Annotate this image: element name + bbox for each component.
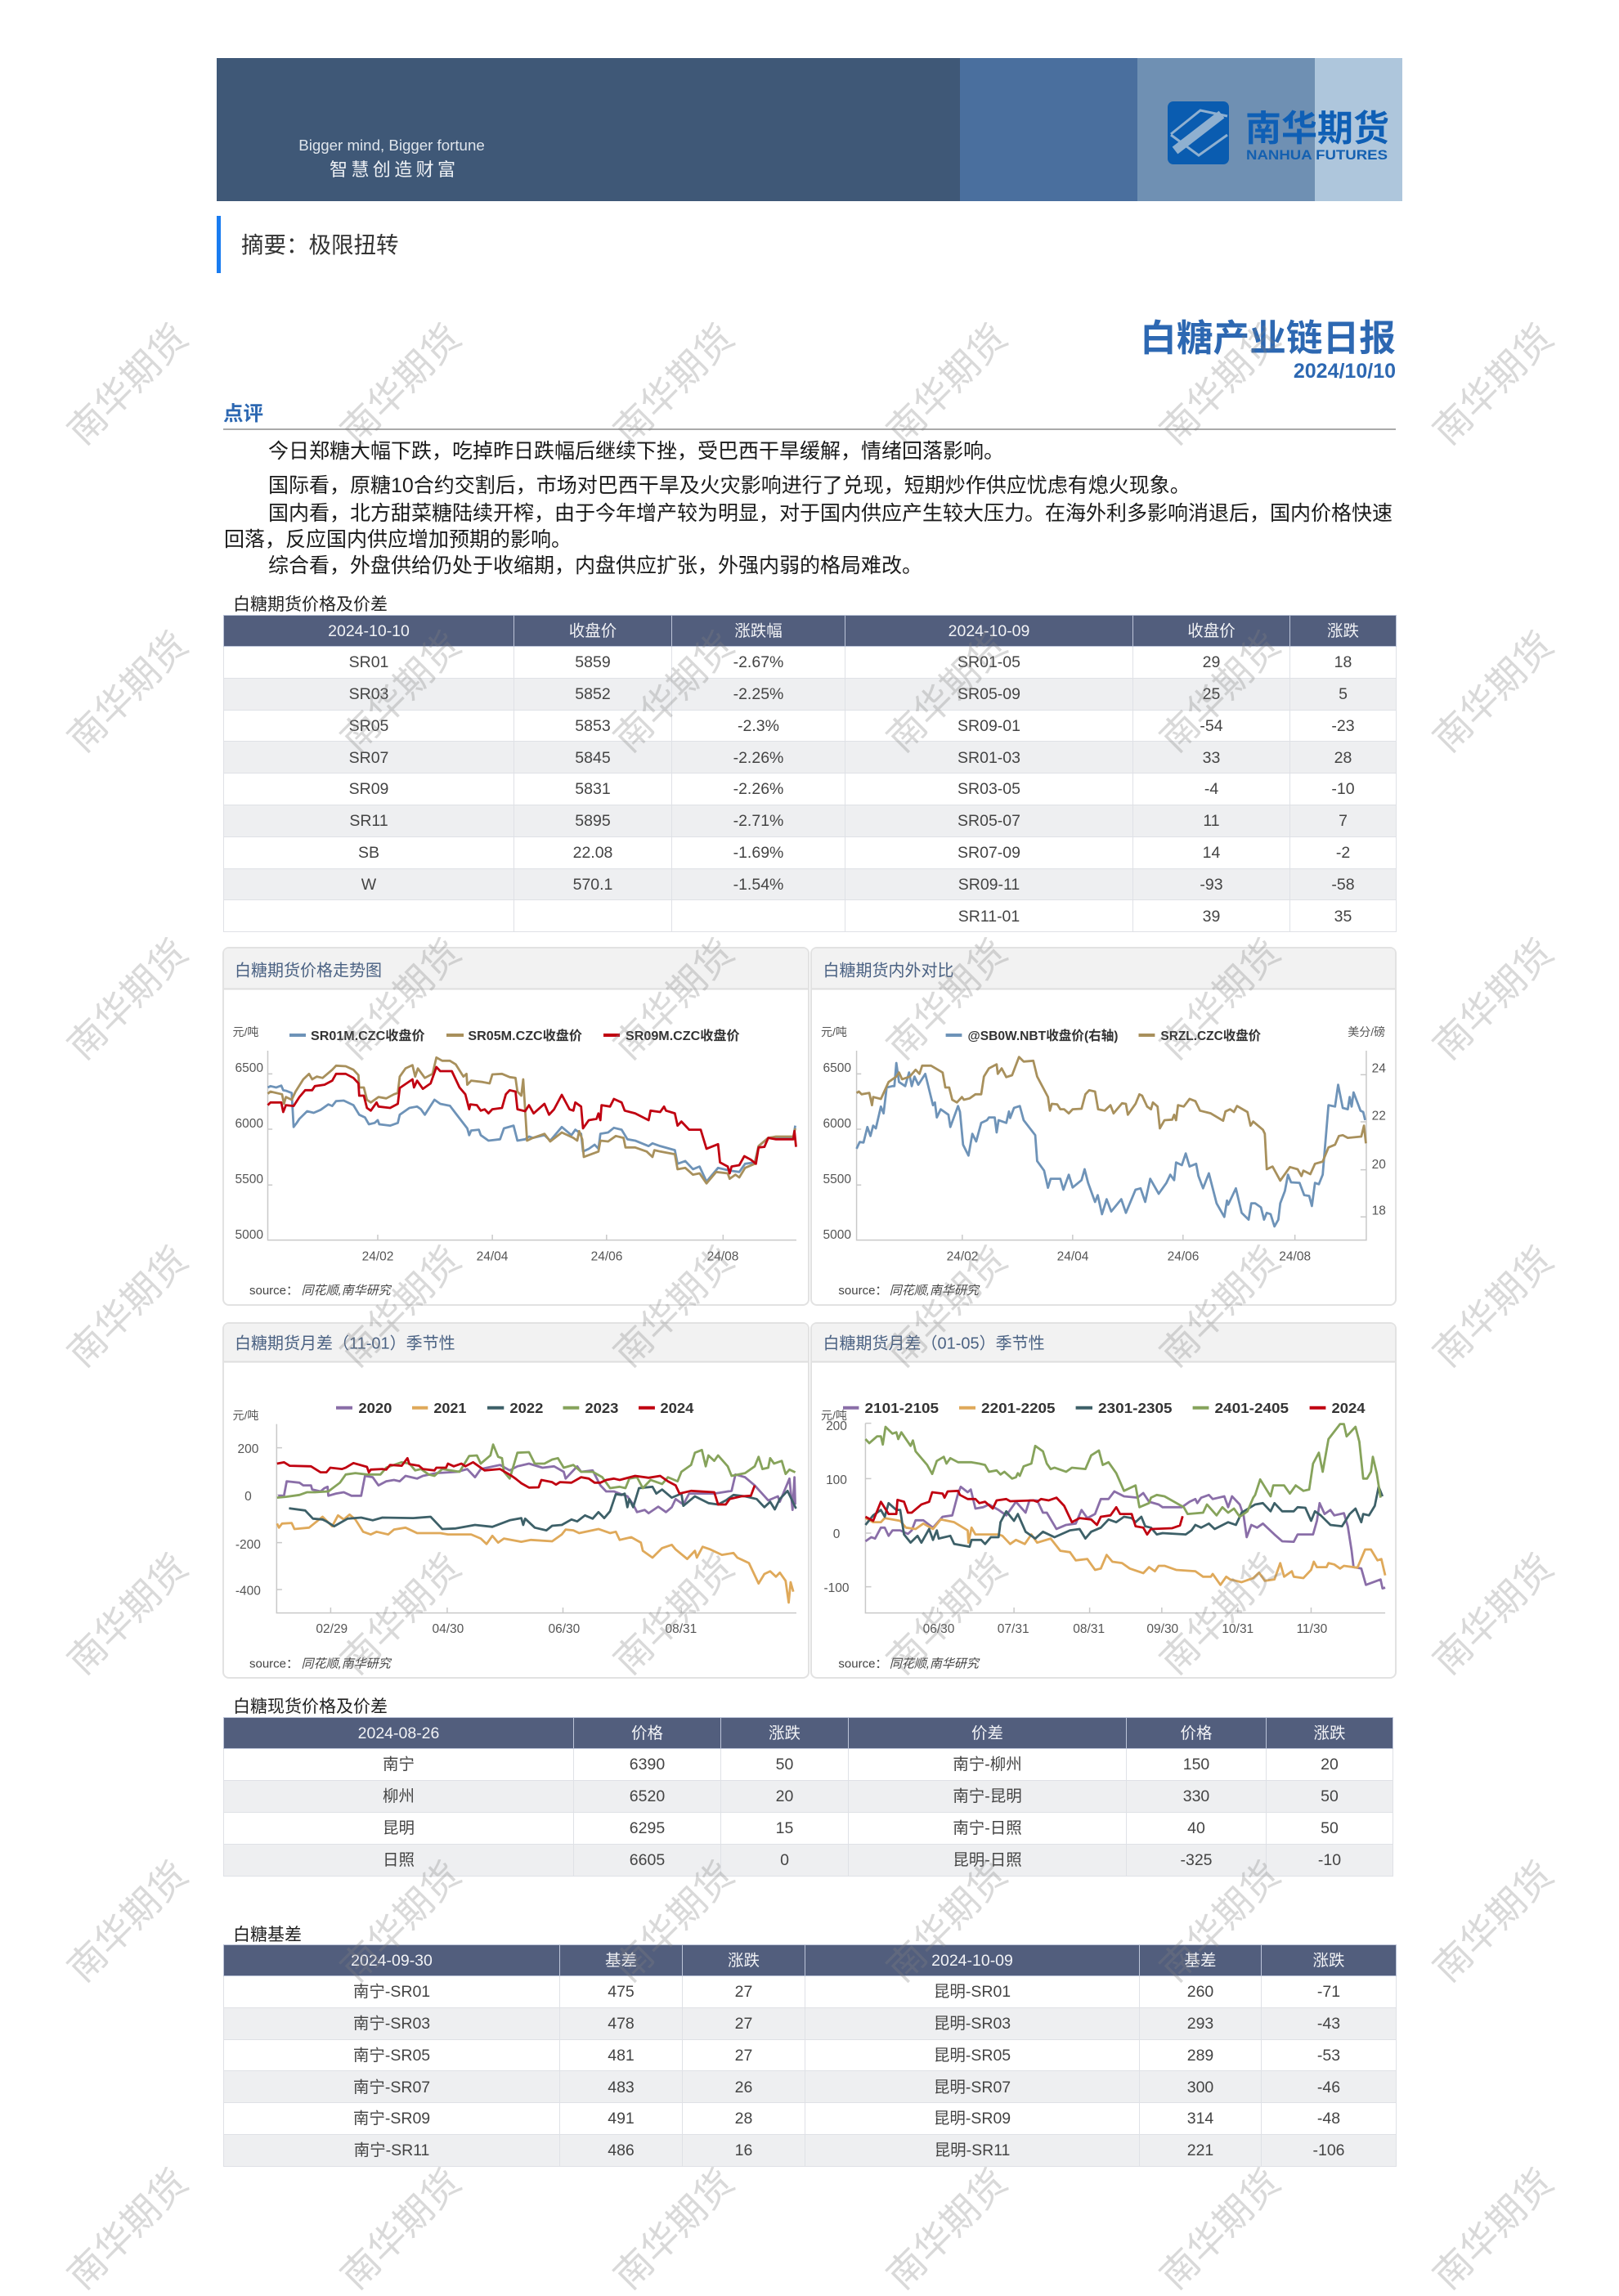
table: basis: 昆明-SR03 — [934, 2015, 1011, 2033]
y axis labels: 200 — [826, 1419, 847, 1433]
watermark overlay: 南华期货 — [879, 1239, 1015, 1374]
legend — [946, 1028, 1261, 1043]
watermark overlay: 南华期货 — [333, 316, 469, 452]
line chart — [865, 1424, 1385, 1613]
watermark overlay: 南华期货 — [879, 931, 1015, 1067]
slogan english: Bigger mind, Bigger fortune — [298, 137, 485, 154]
watermark overlay: 南华期货 — [60, 1239, 195, 1374]
x axis labels: 24/08 — [1279, 1249, 1311, 1264]
watermark overlay: 南华期货 — [333, 1239, 469, 1374]
table: basis: 27 — [735, 1983, 752, 2001]
legend: 2022 — [509, 1400, 544, 1416]
summary heading — [217, 216, 399, 273]
table: basis: 26 — [735, 2079, 752, 2096]
watermark overlay: 南华期货 — [333, 624, 469, 760]
watermark overlay: 南华期货 — [1152, 1239, 1288, 1374]
table: futures prices and spreads: 5 — [1339, 685, 1348, 703]
table: futures prices and spreads: 29 — [1203, 653, 1220, 671]
source note: source： — [249, 1657, 298, 1671]
y axis labels: 0 — [833, 1527, 841, 1541]
x axis labels: 02/29 — [316, 1622, 348, 1636]
table: futures prices and spreads: -1.69% — [733, 844, 783, 862]
table: spot prices and spreads: 昆明 — [383, 1819, 415, 1837]
legend: 2020 — [358, 1400, 392, 1416]
x axis labels: 08/31 — [1073, 1622, 1105, 1636]
table: basis: 涨跌 — [1312, 1952, 1344, 1970]
table: futures prices and spreads: -2.26% — [733, 780, 783, 798]
x axis labels: 24/06 — [591, 1249, 622, 1264]
table: spot prices and spreads: 20 — [1321, 1756, 1339, 1774]
source note — [249, 1657, 392, 1671]
y axis labels: 100 — [826, 1473, 847, 1487]
table: futures prices and spreads: SR09-11 — [958, 876, 1020, 894]
table: spot prices and spreads: 40 — [1187, 1819, 1205, 1837]
table: spot prices and spreads: 15 — [776, 1819, 793, 1837]
table: futures prices and spreads: 25 — [1203, 685, 1220, 703]
panel: 01-05 seasonality — [811, 1323, 1396, 1678]
table: basis: 基差 — [605, 1952, 637, 1970]
table: futures prices and spreads: 5845 — [575, 749, 611, 767]
blue accent bar — [217, 216, 221, 273]
table: basis: 涨跌 — [728, 1952, 760, 1970]
legend: 2401-2405 — [1215, 1400, 1289, 1416]
table: futures prices and spreads: SR03 — [349, 685, 388, 703]
watermark overlay: 南华期货 — [879, 2161, 1015, 2296]
table: futures prices and spreads: 7 — [1339, 812, 1348, 830]
table: futures prices and spreads: 涨跌 — [1327, 622, 1359, 640]
line chart — [276, 1424, 796, 1613]
table: spot prices and spreads: 柳州 — [383, 1787, 415, 1805]
table: futures prices and spreads: -2.26% — [733, 749, 783, 767]
table: futures prices and spreads: -54 — [1200, 717, 1223, 735]
logo — [1168, 101, 1389, 164]
table: spot prices and spreads: 20 — [776, 1787, 793, 1805]
banner stripe 2 — [960, 58, 1137, 201]
table: futures prices and spreads: 18 — [1334, 653, 1352, 671]
left y axis labels: 6000 — [823, 1117, 851, 1131]
table: basis: 2024-09-30 — [351, 1952, 433, 1970]
legend — [289, 1028, 740, 1043]
y axis labels: 5000 — [235, 1228, 263, 1242]
panel title: 白糖期货价格走势图 — [235, 962, 382, 980]
table: basis: 27 — [735, 2047, 752, 2065]
watermark overlay: 南华期货 — [1425, 1854, 1561, 1989]
watermark overlay: 南华期货 — [1152, 624, 1288, 760]
legend: SR05M.CZC收盘价 — [468, 1028, 582, 1043]
table: basis: 300 — [1187, 2079, 1213, 2096]
source note: 同花顺,南华研究 — [890, 1284, 980, 1298]
paragraph 2: 国际看，原糖10合约交割后，市场对巴西干旱及火灾影响进行了兑现，短期炒作供应忧虑有熄火现象。 — [268, 474, 1191, 497]
table: basis: 南宁-SR03 — [353, 2015, 430, 2033]
left unit label: 元/吨 — [821, 1025, 847, 1038]
right y axis labels: 20 — [1372, 1158, 1386, 1172]
watermark overlay: 南华期货 — [1425, 1239, 1561, 1374]
x axis labels: 24/02 — [362, 1249, 393, 1264]
legend: 2201-2205 — [981, 1400, 1056, 1416]
table: futures prices and spreads: SR11 — [349, 812, 388, 830]
y axis labels: -100 — [823, 1581, 850, 1595]
watermark overlay: 南华期货 — [1425, 624, 1561, 760]
table: futures prices and spreads: -93 — [1200, 876, 1223, 894]
legend: @SB0W.NBT收盘价(右轴) — [968, 1028, 1119, 1043]
x axis labels: 06/30 — [549, 1622, 581, 1636]
watermark overlay: 南华期货 — [60, 1854, 195, 1989]
watermark overlay: 南华期货 — [879, 316, 1015, 452]
table: spot prices and spreads: 南宁-昆明 — [953, 1787, 1022, 1805]
watermark overlay: 南华期货 — [606, 316, 742, 452]
panel: 11-01 seasonality — [223, 1323, 809, 1678]
y axis labels: 5500 — [235, 1173, 263, 1186]
table: futures prices and spreads: 5831 — [575, 780, 611, 798]
watermark overlay: 南华期货 — [333, 1546, 469, 1682]
table: futures prices and spreads: SR01-03 — [957, 749, 1020, 767]
table: spot prices and spreads: 南宁 — [383, 1756, 415, 1774]
legend: 2301-2305 — [1098, 1400, 1173, 1416]
table: futures prices and spreads: 11 — [1203, 812, 1220, 830]
table: spot prices and spreads: 价格 — [1180, 1724, 1212, 1742]
watermark overlay: 南华期货 — [60, 1546, 195, 1682]
table: basis: 昆明-SR09 — [934, 2110, 1011, 2128]
x axis labels: 24/08 — [707, 1249, 738, 1264]
table: futures prices and spreads: 14 — [1203, 844, 1220, 862]
legend: SR01M.CZC收盘价 — [311, 1028, 425, 1043]
logo english name: NANHUA FUTURES — [1246, 148, 1388, 163]
table: futures prices and spreads: 39 — [1203, 908, 1220, 926]
table: basis: 昆明-SR01 — [934, 1983, 1011, 2001]
watermark overlay: 南华期货 — [879, 1546, 1015, 1682]
y axis labels: -200 — [235, 1538, 261, 1552]
y axis labels — [235, 1442, 261, 1598]
table: futures prices and spreads: SR07 — [349, 749, 388, 767]
legend: 2101-2105 — [865, 1400, 939, 1416]
summary text: 摘要：极限扭转 — [241, 232, 399, 258]
legend: 2023 — [585, 1400, 619, 1416]
paragraph 1: 今日郑糖大幅下跌，吃掉昨日跌幅后继续下挫，受巴西干旱缓解，情绪回落影响。 — [268, 440, 1004, 463]
report title: 白糖产业链日报 — [1140, 319, 1396, 359]
table: spot prices and spreads: 0 — [780, 1851, 789, 1869]
table: basis: -43 — [1317, 2015, 1340, 2033]
table: futures prices and spreads: W — [361, 876, 376, 894]
watermark overlay: 南华期货 — [333, 2161, 469, 2296]
table: spot prices and spreads: 日照 — [383, 1851, 415, 1869]
table: futures prices and spreads: -2.71% — [733, 812, 783, 830]
panel title: 白糖期货月差（11-01）季节性 — [235, 1334, 455, 1352]
source note: 同花顺,南华研究 — [301, 1657, 392, 1671]
table: futures prices and spreads — [223, 615, 1397, 932]
unit label: 元/吨 — [232, 1025, 258, 1038]
table: basis: 昆明-SR11 — [935, 2141, 1010, 2159]
y axis labels: 6000 — [235, 1117, 263, 1131]
table: basis: 南宁-SR11 — [354, 2141, 429, 2159]
report date: 2024/10/10 — [1294, 360, 1396, 383]
x axis labels: 24/06 — [1168, 1249, 1199, 1264]
legend: SR09M.CZC收盘价 — [626, 1028, 740, 1043]
x axis labels: 24/04 — [477, 1249, 509, 1264]
table: spot prices and spreads: 2024-08-26 — [358, 1724, 439, 1742]
table: futures prices and spreads: 33 — [1203, 749, 1220, 767]
source note — [838, 1657, 980, 1671]
table: basis: 293 — [1187, 2015, 1213, 2033]
watermark overlay: 南华期货 — [60, 624, 195, 760]
table: futures prices and spreads: 28 — [1334, 749, 1352, 767]
table: spot prices and spreads: 50 — [1321, 1787, 1339, 1805]
table: futures prices and spreads: 收盘价 — [569, 622, 617, 640]
table: basis: 2024-10-09 — [931, 1952, 1013, 1970]
table label: futures: 白糖期货价格及价差 — [233, 595, 388, 614]
watermark overlay: 南华期货 — [1425, 1546, 1561, 1682]
right y axis labels: 24 — [1372, 1061, 1386, 1076]
y axis labels — [823, 1419, 850, 1595]
table: futures prices and spreads: 2024-10-10 — [328, 622, 410, 640]
paragraph 3: 国内看，北方甜菜糖陆续开榨，由于今年增产较为明显，对于国内供应产生较大压力。在海外利多影响消退后，国内价格快速回落，反应国内供应增加预期的影响。 — [224, 502, 1393, 551]
table: futures prices and spreads: 22.08 — [573, 844, 612, 862]
table label: basis: 白糖基差 — [233, 1926, 302, 1944]
table: basis: 481 — [608, 2047, 635, 2065]
table: futures prices and spreads: SR01 — [349, 653, 388, 671]
table: spot prices and spreads: 南宁-日照 — [953, 1819, 1022, 1837]
y axis labels: 200 — [237, 1442, 259, 1456]
line chart — [267, 1051, 796, 1240]
table: futures prices and spreads: SR05-09 — [957, 685, 1020, 703]
table: basis: -106 — [1312, 2141, 1345, 2159]
table: basis: 昆明-SR07 — [934, 2079, 1011, 2096]
watermark overlay: 南华期货 — [606, 1546, 742, 1682]
logo chinese name: 南华期货 — [1245, 109, 1389, 149]
left y axis labels: 5500 — [823, 1173, 851, 1186]
right y axis labels: 18 — [1372, 1204, 1386, 1218]
table: spot prices and spreads: 昆明-日照 — [953, 1851, 1022, 1869]
table: spot prices and spreads: 南宁-柳州 — [953, 1756, 1022, 1774]
legend — [336, 1400, 694, 1416]
y axis labels: 6500 — [235, 1061, 263, 1075]
table: futures prices and spreads: SR03-05 — [957, 780, 1020, 798]
watermark overlay: 南华期货 — [879, 1854, 1015, 1989]
y axis labels: 0 — [244, 1490, 252, 1504]
table: basis: 478 — [608, 2015, 635, 2033]
table: basis: -46 — [1317, 2079, 1340, 2096]
left y axis labels: 5000 — [823, 1228, 851, 1242]
table: spot prices and spreads: 涨跌 — [1313, 1724, 1346, 1742]
table: basis: 16 — [735, 2141, 752, 2159]
legend — [843, 1400, 1366, 1416]
watermark overlay: 南华期货 — [879, 624, 1015, 760]
table: futures prices and spreads: 2024-10-09 — [949, 622, 1029, 640]
logo mark — [1168, 101, 1229, 164]
table: basis: 475 — [608, 1983, 635, 2001]
table: spot prices and spreads: 330 — [1183, 1787, 1209, 1805]
source note: source： — [838, 1284, 887, 1298]
panel: futures price trend — [223, 948, 809, 1305]
watermark overlay: 南华期货 — [60, 2161, 195, 2296]
table: futures prices and spreads: -23 — [1331, 717, 1355, 735]
table: futures prices and spreads: SR09 — [349, 780, 388, 798]
table: futures prices and spreads: -2.25% — [733, 685, 783, 703]
watermark overlay: 南华期货 — [1425, 316, 1561, 452]
table: futures prices and spreads: 5852 — [575, 685, 611, 703]
table: basis: 314 — [1187, 2110, 1213, 2128]
table: futures prices and spreads: -10 — [1331, 780, 1355, 798]
table: futures prices and spreads: 涨跌幅 — [734, 622, 783, 640]
table: futures prices and spreads: SR05 — [349, 717, 388, 735]
source note: 同花顺,南华研究 — [301, 1284, 392, 1298]
panel: domestic vs international — [811, 948, 1396, 1305]
table: spot prices and spreads: 涨跌 — [769, 1724, 801, 1742]
table: basis: 260 — [1187, 1983, 1213, 2001]
table: basis: 南宁-SR05 — [353, 2047, 430, 2065]
banner stripe 3 — [1137, 58, 1315, 201]
commentary label: 点评 — [223, 403, 263, 425]
watermark overlay: 南华期货 — [1152, 931, 1288, 1067]
table: basis: 289 — [1187, 2047, 1213, 2065]
x axis labels: 06/30 — [923, 1622, 955, 1636]
source note — [838, 1284, 980, 1298]
watermark overlay: 南华期货 — [1152, 2161, 1288, 2296]
table label: spot: 白糖现货价格及价差 — [233, 1697, 388, 1716]
x axis labels: 24/04 — [1057, 1249, 1089, 1264]
x axis labels: 10/31 — [1222, 1622, 1253, 1636]
header banner — [217, 58, 1402, 201]
table: futures prices and spreads: SB — [358, 844, 379, 862]
watermark overlay: 南华期货 — [1152, 1854, 1288, 1989]
watermark overlay: 南华期货 — [606, 624, 742, 760]
watermark overlay: 南华期货 — [606, 931, 742, 1067]
watermark overlay: 南华期货 — [333, 1854, 469, 1989]
table: spot prices and spreads: 6520 — [630, 1787, 665, 1805]
table: futures prices and spreads: 570.1 — [573, 876, 612, 894]
table: basis: -71 — [1317, 1983, 1340, 2001]
table: futures prices and spreads: -58 — [1331, 876, 1355, 894]
table: basis: 28 — [735, 2110, 752, 2128]
table: spot prices and spreads: 6390 — [630, 1756, 665, 1774]
table: futures prices and spreads: -2.3% — [738, 717, 779, 735]
y axis labels — [235, 1061, 263, 1242]
right y axis labels: 22 — [1372, 1109, 1386, 1123]
x axis labels — [947, 1249, 1311, 1264]
y axis labels: -400 — [235, 1585, 261, 1598]
table: spot prices and spreads: 6605 — [630, 1851, 665, 1869]
x axis labels: 09/30 — [1146, 1622, 1179, 1636]
table: basis: 486 — [608, 2141, 635, 2159]
x axis labels — [923, 1622, 1328, 1636]
watermark overlay: 南华期货 — [606, 1854, 742, 1989]
table: basis: 491 — [608, 2110, 635, 2128]
panel title: 白糖期货内外对比 — [823, 962, 953, 980]
watermark overlay: 南华期货 — [1425, 2161, 1561, 2296]
table: spot prices and spreads: 价格 — [631, 1724, 663, 1742]
table: basis: 南宁-SR09 — [353, 2110, 430, 2128]
paragraph 4: 综合看，外盘供给仍处于收缩期，内盘供应扩张，外强内弱的格局难改。 — [268, 554, 922, 577]
table: basis: 221 — [1187, 2141, 1213, 2159]
watermark overlay: 南华期货 — [60, 316, 195, 452]
x axis labels: 04/30 — [433, 1622, 464, 1636]
table: futures prices and spreads: SR01-05 — [957, 653, 1020, 671]
x axis labels: 11/30 — [1297, 1622, 1328, 1636]
table: basis: -48 — [1317, 2110, 1340, 2128]
table: spot prices and spreads: 6295 — [630, 1819, 665, 1837]
commentary text — [224, 440, 1393, 577]
panel title: 白糖期货月差（01-05）季节性 — [823, 1334, 1045, 1352]
table: futures prices and spreads: -1.54% — [733, 876, 783, 894]
table: basis: 南宁-SR01 — [353, 1983, 430, 2001]
table: futures prices and spreads: -4 — [1204, 780, 1218, 798]
table: basis: -53 — [1317, 2047, 1340, 2065]
legend: 2021 — [433, 1400, 467, 1416]
slogan chinese: 智慧创造财富 — [330, 159, 459, 180]
watermark overlay: 南华期货 — [1152, 1546, 1288, 1682]
source note: 同花顺,南华研究 — [890, 1657, 980, 1671]
table: futures prices and spreads: 35 — [1334, 908, 1352, 926]
banner stripe 4 — [1315, 58, 1402, 201]
legend: 2024 — [660, 1400, 694, 1416]
table: basis: 南宁-SR07 — [353, 2079, 430, 2096]
watermark overlay: 南华期货 — [333, 931, 469, 1067]
right unit label: 美分/磅 — [1348, 1025, 1385, 1038]
table: spot prices and spreads: 150 — [1183, 1756, 1209, 1774]
source note: source： — [838, 1657, 887, 1671]
table: basis: 基差 — [1184, 1952, 1217, 1970]
table: futures prices and spreads: -2 — [1336, 844, 1350, 862]
legend: SRZL.CZC收盘价 — [1160, 1028, 1261, 1043]
table: basis: 483 — [608, 2079, 635, 2096]
watermark overlay: 南华期货 — [60, 931, 195, 1067]
right y axis labels — [1372, 1061, 1386, 1218]
table: spot prices and spreads: -325 — [1180, 1851, 1213, 1869]
table: basis: 27 — [735, 2015, 752, 2033]
table: futures prices and spreads: SR11-01 — [958, 908, 1020, 926]
table: futures prices and spreads: SR05-07 — [957, 812, 1020, 830]
table: spot prices and spreads: -10 — [1318, 1851, 1341, 1869]
watermark overlay: 南华期货 — [606, 2161, 742, 2296]
table: futures prices and spreads: 5895 — [575, 812, 611, 830]
x axis labels — [362, 1249, 738, 1264]
watermark overlay: 南华期货 — [1152, 316, 1288, 452]
table: futures prices and spreads: -2.67% — [733, 653, 783, 671]
table: basis — [223, 1944, 1397, 2167]
legend: 2024 — [1331, 1400, 1366, 1416]
table: futures prices and spreads: SR07-09 — [957, 844, 1020, 862]
unit label: 元/吨 — [232, 1409, 258, 1422]
table: futures prices and spreads: SR09-01 — [957, 717, 1020, 735]
watermark overlay: 南华期货 — [1425, 931, 1561, 1067]
left y axis labels: 6500 — [823, 1061, 851, 1075]
x axis labels: 24/02 — [947, 1249, 978, 1264]
x axis labels: 08/31 — [666, 1622, 697, 1636]
table: futures prices and spreads: 5853 — [575, 717, 611, 735]
left y axis labels — [823, 1061, 851, 1242]
table: spot prices and spreads: 50 — [776, 1756, 793, 1774]
line chart — [857, 1051, 1366, 1240]
source note: source： — [249, 1284, 298, 1298]
section heading: commentary — [223, 401, 1396, 430]
table: futures prices and spreads: 5859 — [575, 653, 611, 671]
source note — [249, 1284, 392, 1298]
x axis labels — [316, 1622, 697, 1636]
table: spot prices and spreads: 价差 — [971, 1724, 1003, 1742]
table: spot prices and spreads — [223, 1717, 1393, 1877]
table: basis: 昆明-SR05 — [934, 2047, 1011, 2065]
x axis labels: 07/31 — [998, 1622, 1029, 1636]
watermark overlay: 南华期货 — [606, 1239, 742, 1374]
unit label: 元/吨 — [821, 1409, 847, 1422]
table: spot prices and spreads: 50 — [1321, 1819, 1339, 1837]
table: futures prices and spreads: 收盘价 — [1187, 622, 1236, 640]
